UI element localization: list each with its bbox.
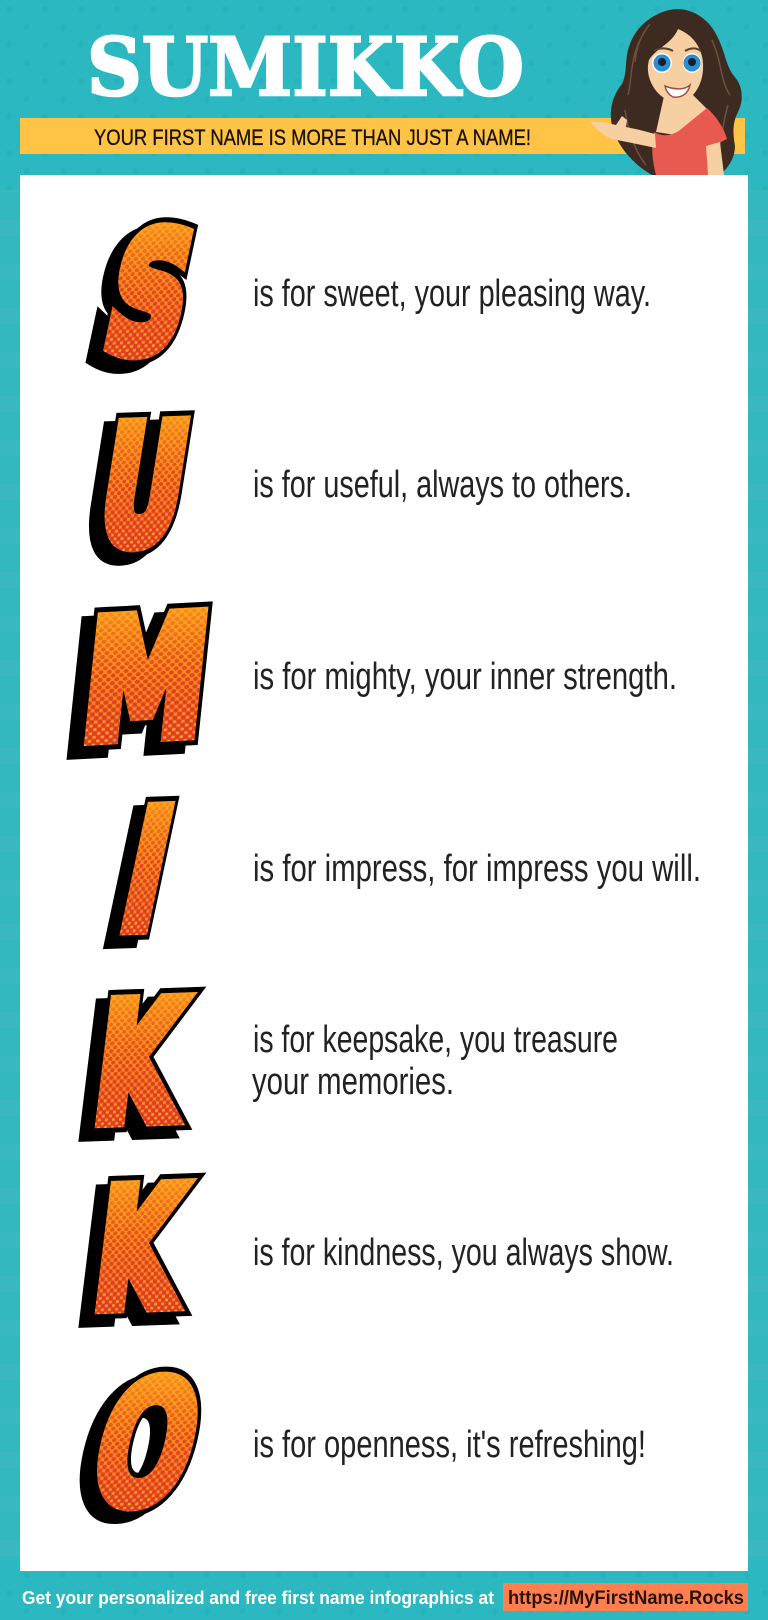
eyebrows: [654, 48, 701, 51]
letter S: S: [92, 198, 208, 390]
letter I: I: [109, 777, 185, 966]
letter K: K: [87, 968, 193, 1158]
title: SUMIKKO: [87, 20, 524, 114]
shirt: [652, 108, 727, 175]
letter K: [78, 1172, 206, 1328]
letter O: O: [74, 1344, 219, 1547]
neck: [656, 94, 708, 136]
face: [648, 29, 703, 102]
letter M: M: [76, 582, 216, 776]
letter K: K: [87, 968, 193, 1158]
letter O: O: [74, 1344, 219, 1547]
letter M: M: [63, 591, 203, 785]
letter U: U: [76, 400, 186, 590]
letter I: I: [109, 777, 185, 966]
letter S: S: [92, 198, 208, 390]
footer text: Get your personalized and free first name infographics at: [22, 1588, 494, 1608]
letter K: K: [87, 968, 193, 1158]
letter I: I: [109, 777, 185, 966]
letter K: [78, 986, 206, 1142]
lines for K: is for keepsake, you treasure: [253, 1019, 618, 1061]
letter M: M: [76, 582, 216, 776]
footer: [22, 1583, 748, 1611]
letter U: U: [89, 391, 199, 582]
smile: [665, 85, 690, 97]
url badge: https://MyFirstName.Rocks: [508, 1588, 744, 1609]
letter S: S: [92, 198, 208, 390]
letter K: K: [87, 1154, 193, 1344]
line for O: is for openness, it's refreshing!: [253, 1424, 646, 1466]
letter U: U: [89, 391, 199, 582]
banner: [20, 118, 745, 154]
letter O: O: [74, 1344, 219, 1547]
letter K: K: [87, 1154, 193, 1344]
letter S: S: [92, 198, 208, 390]
line for U: is for useful, always to others.: [253, 464, 632, 506]
arm and hand: [590, 116, 656, 148]
lines for K: [252, 1019, 618, 1103]
letter S: S: [78, 207, 194, 398]
letter K: K: [74, 1162, 180, 1353]
hair: [611, 9, 742, 175]
letter U: U: [89, 391, 199, 582]
letter I: I: [97, 785, 172, 974]
illustration: woman presenting: [590, 9, 742, 175]
letter K: K: [74, 976, 180, 1167]
letter U: U: [89, 391, 199, 582]
letter M: M: [76, 582, 216, 776]
lines for K: your memories.: [252, 1061, 454, 1103]
eyes: [652, 53, 701, 73]
right arm: [706, 142, 724, 175]
letter K: K: [87, 968, 193, 1158]
line for S: is for sweet, your pleasing way.: [253, 273, 651, 315]
banner tagline: YOUR FIRST NAME IS MORE THAN JUST A NAME!: [94, 125, 531, 150]
letter O: O: [74, 1344, 219, 1547]
letter O: [80, 1366, 202, 1524]
letter I: I: [109, 777, 185, 966]
letter O: O: [60, 1352, 205, 1555]
letter M: M: [76, 582, 216, 776]
letter K: K: [87, 1154, 193, 1344]
letter K: K: [87, 1154, 193, 1344]
